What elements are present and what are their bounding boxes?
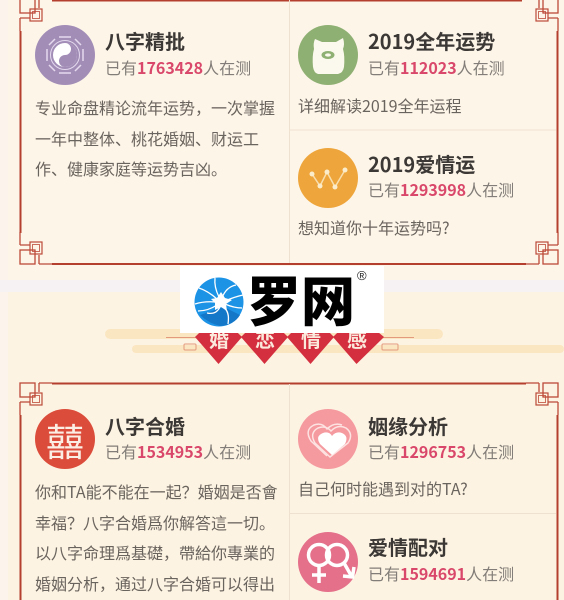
card text: 八字精批: 一年中整体、桃花婚姻、财运工 <box>35 126 259 150</box>
banner: cloud bands <box>105 329 564 353</box>
card heading: 2019全年运势 <box>368 26 505 79</box>
banner text: 婚恋情感 <box>209 324 367 353</box>
card heading: 姻缘分析: 已有1296753人在测 <box>368 439 514 463</box>
card text: 八字合婚 <box>35 479 278 594</box>
icon: pig <box>298 25 358 85</box>
card heading: 八字合婚: 八字合婚 <box>105 411 185 440</box>
dividers: lower panel <box>290 384 556 600</box>
banner text: 婚恋情感: 感 <box>347 324 367 353</box>
card heading: 姻缘分析 <box>368 411 514 463</box>
card heading: 2019全年运势: 已有112023人在测 <box>368 55 505 79</box>
card heading: 2019爱情运: 已有1293998人在测 <box>368 177 514 201</box>
banner: thin ribbon lines and scrolls <box>166 338 414 350</box>
banner text: 婚恋情感: 婚 <box>209 324 229 353</box>
card text: 八字合婚: 幸福？八字合婚爲你解答這一切。 <box>35 510 275 534</box>
icon: double happiness circle <box>35 409 95 469</box>
card text: 2019全年运势: 详细解读2019全年运程 <box>298 93 462 117</box>
card text: 八字合婚: 你和TA能不能在一起？婚姻是否會 <box>35 479 278 503</box>
card heading: 八字精批: 八字精批 <box>105 26 185 55</box>
banner: red diamonds <box>195 314 384 364</box>
card heading: 八字精批: 已有1763428人在测 <box>105 55 251 79</box>
card text: 八字精批: 作、健康家庭等运势吉凶。 <box>35 156 227 180</box>
card heading: 爱情配对: 爱情配对 <box>368 532 448 561</box>
logo icon: blue globe <box>194 278 244 326</box>
double happiness glyph: 囍 <box>46 412 84 467</box>
card heading: 爱情配对: 已有1594691人在测 <box>368 561 514 585</box>
icon: hearts <box>298 409 358 469</box>
logo: 罗网 <box>180 266 384 333</box>
card heading: 八字精批 <box>105 26 251 79</box>
card text: 八字合婚: 以八字命理爲基礎，帶給你專業的 <box>35 540 275 564</box>
card heading: 2019爱情运: 2019爱情运 <box>368 149 475 178</box>
card heading: 八字合婚 <box>105 411 251 463</box>
card heading: 爱情配对 <box>368 532 514 585</box>
card heading: 姻缘分析: 姻缘分析 <box>368 411 448 440</box>
card text: 姻缘分析: 自己何时能遇到对的TA? <box>298 476 468 500</box>
frame: top panel <box>20 0 558 264</box>
frame: lower panel <box>20 383 558 600</box>
icon: bagua yin-yang <box>35 25 95 85</box>
card text: 八字精批: 专业命盘精论流年运势，一次掌握 <box>35 95 275 119</box>
logo wordmark: 罗网 <box>247 258 355 337</box>
card heading: 2019全年运势: 2019全年运势 <box>368 26 495 55</box>
card text: 2019爱情运: 想知道你十年运势吗? <box>298 215 450 239</box>
card heading: 八字合婚: 已有1534953人在测 <box>105 439 251 463</box>
banner text: 婚恋情感: 情 <box>301 324 321 353</box>
card text: 八字精批 <box>35 95 275 180</box>
card text: 八字合婚: 婚姻分析，通过八字合婚可以得出 <box>35 570 275 594</box>
card heading: 2019爱情运 <box>368 149 514 201</box>
dividers: top panel <box>290 0 556 263</box>
icon: male and female symbols <box>298 532 358 592</box>
banner text: 婚恋情感: 恋 <box>255 324 275 353</box>
registered mark: ® <box>357 268 367 283</box>
icon: love trend line <box>298 148 358 208</box>
